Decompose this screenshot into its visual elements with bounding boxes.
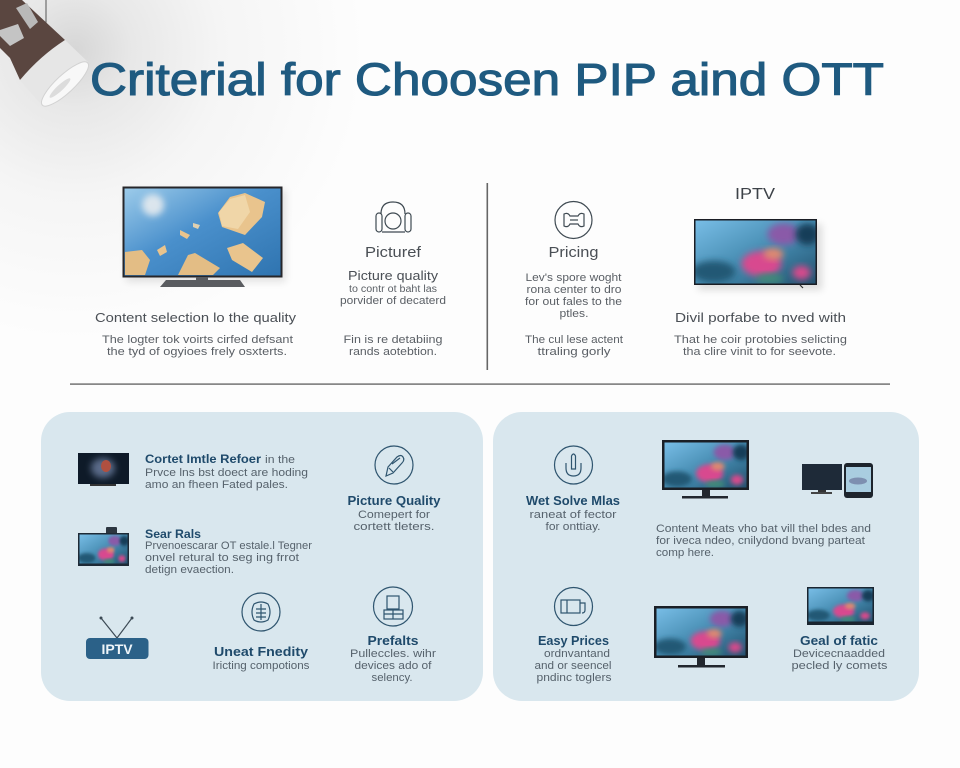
title: Criterial for Choosen PIP aind OTT (90, 54, 884, 105)
text: easy prices: pndinc toglers (536, 672, 612, 684)
text: pricing description: Lev's spore woght (526, 272, 622, 284)
text: prefalts: Prefalts (368, 634, 419, 648)
tv: IPTV (692, 219, 822, 290)
icon: picture (376, 202, 411, 232)
text: content selection description: the tyd of ogyioes frely osxterts. (107, 346, 287, 358)
text: picture quality (348, 494, 441, 533)
text: picture quality: Picture quality (348, 268, 439, 283)
icon: spotlight lamp (0, 0, 94, 112)
divider: horizontal (70, 383, 890, 385)
text: friendly (212, 645, 310, 672)
text: picture quality: Fin is re detabiing (344, 334, 442, 346)
text: web solve: raneat of fector (530, 509, 617, 521)
text: prefalts: devices ado of (354, 660, 433, 672)
text: easy prices: and or seencel (534, 660, 612, 672)
text: content description (656, 523, 871, 559)
text: search block: detign evaection. (145, 564, 234, 576)
text: easy prices: Easy Prices (538, 634, 609, 648)
heading: IPTV: IPTV (735, 186, 775, 203)
text: web solve: for onttiay. (546, 521, 600, 533)
text: picture quality: Comepert for (358, 509, 430, 521)
text: pricing description: for out fales to the (525, 296, 622, 308)
badge: IPTV (86, 616, 148, 659)
text: prefalts: selency. (372, 672, 412, 684)
text: picture quality: Picture Quality (348, 494, 441, 508)
panel: right (493, 412, 919, 701)
text: easy prices: ordnvantand (544, 648, 610, 660)
text: device description: That he coir protobies selicting (674, 334, 847, 346)
heading: device portability: Divil porfabe to nved with (675, 310, 846, 325)
text: picture quality: porvider of decaterd (340, 295, 446, 307)
tv: large bottom (654, 606, 748, 668)
panel: left (41, 412, 483, 701)
text: search block: Prvenoescarar OT estale.l Tegner (145, 540, 312, 552)
text: search block (145, 527, 312, 576)
icon: devices (374, 587, 412, 626)
text: device description (674, 334, 847, 358)
text: friendly: Uneat Fnedity (214, 645, 308, 659)
text: pricing description: The cul lese actent (525, 334, 623, 346)
text: prefalts (350, 634, 436, 684)
section: top criteria row (95, 183, 847, 370)
text: content selection description (102, 334, 293, 358)
tv: content selection (122, 186, 286, 287)
tv: small with camera (78, 527, 129, 566)
text: device description: tha clire vinit to for seevote. (683, 346, 836, 358)
icon: pencil (375, 446, 413, 484)
text: content block: in the (265, 454, 295, 466)
text: content block: amo an fheen Fated pales. (145, 479, 288, 491)
text: content description: comp here. (656, 547, 714, 559)
tv: small right (806, 587, 875, 625)
icon: tablet (554, 588, 592, 626)
heading: pricing: Pricing (548, 245, 598, 261)
text: web solve (526, 494, 620, 533)
text: goal (792, 634, 888, 672)
heading: content selection: Content selection lo the quality (95, 310, 297, 325)
text: pricing description: ptles. (560, 308, 588, 320)
text: picture quality: rands aotebtion. (349, 346, 437, 358)
text: pricing description: rona center to dro (526, 284, 622, 296)
text: easy prices (534, 634, 612, 684)
text: content block: Cortet Imtle Refoer (145, 452, 261, 466)
text: content description: Content Meats vho bat vill thel bdes and (656, 523, 871, 535)
icon: pricing (555, 202, 592, 238)
text: picture quality: cortett tleters. (354, 521, 434, 533)
text: web solve: Wet Solve Mlas (526, 494, 620, 508)
icon: brain grid (242, 593, 280, 631)
text: goal: Geal of fatic (800, 634, 878, 648)
text: friendly: Iricting compotions (212, 660, 310, 672)
text: content description: for iveca ndeo, cnilydond bvang parteat (656, 535, 865, 547)
text: search block: onvel retural to seg ing frrot (145, 552, 299, 564)
heading: picture: Picturef (365, 245, 422, 261)
divider: vertical (486, 183, 488, 370)
icon: touch (554, 446, 592, 484)
tv: large top (662, 440, 749, 498)
text: prefalts: Pulleccles. wihr (350, 648, 436, 660)
text: pricing description: ttraling gorly (538, 346, 611, 358)
text: content block: Prvce lns bst doect are hoding (145, 467, 308, 479)
tv: small dark (78, 453, 129, 486)
text: goal: pecled ly comets (792, 660, 888, 672)
text: search block: Sear Rals (145, 527, 201, 541)
text: pricing description (525, 272, 623, 358)
text: goal: Devicecnaadded (793, 648, 885, 660)
devices: monitor and phone (802, 463, 873, 498)
text: picture quality: to contr ot baht las (349, 284, 437, 295)
text: content selection description: The logter tok voirts cirfed defsant (102, 334, 293, 346)
badge: IPTV: IPTV (101, 641, 133, 657)
text: picture quality (340, 268, 446, 358)
text: content block (145, 452, 308, 491)
